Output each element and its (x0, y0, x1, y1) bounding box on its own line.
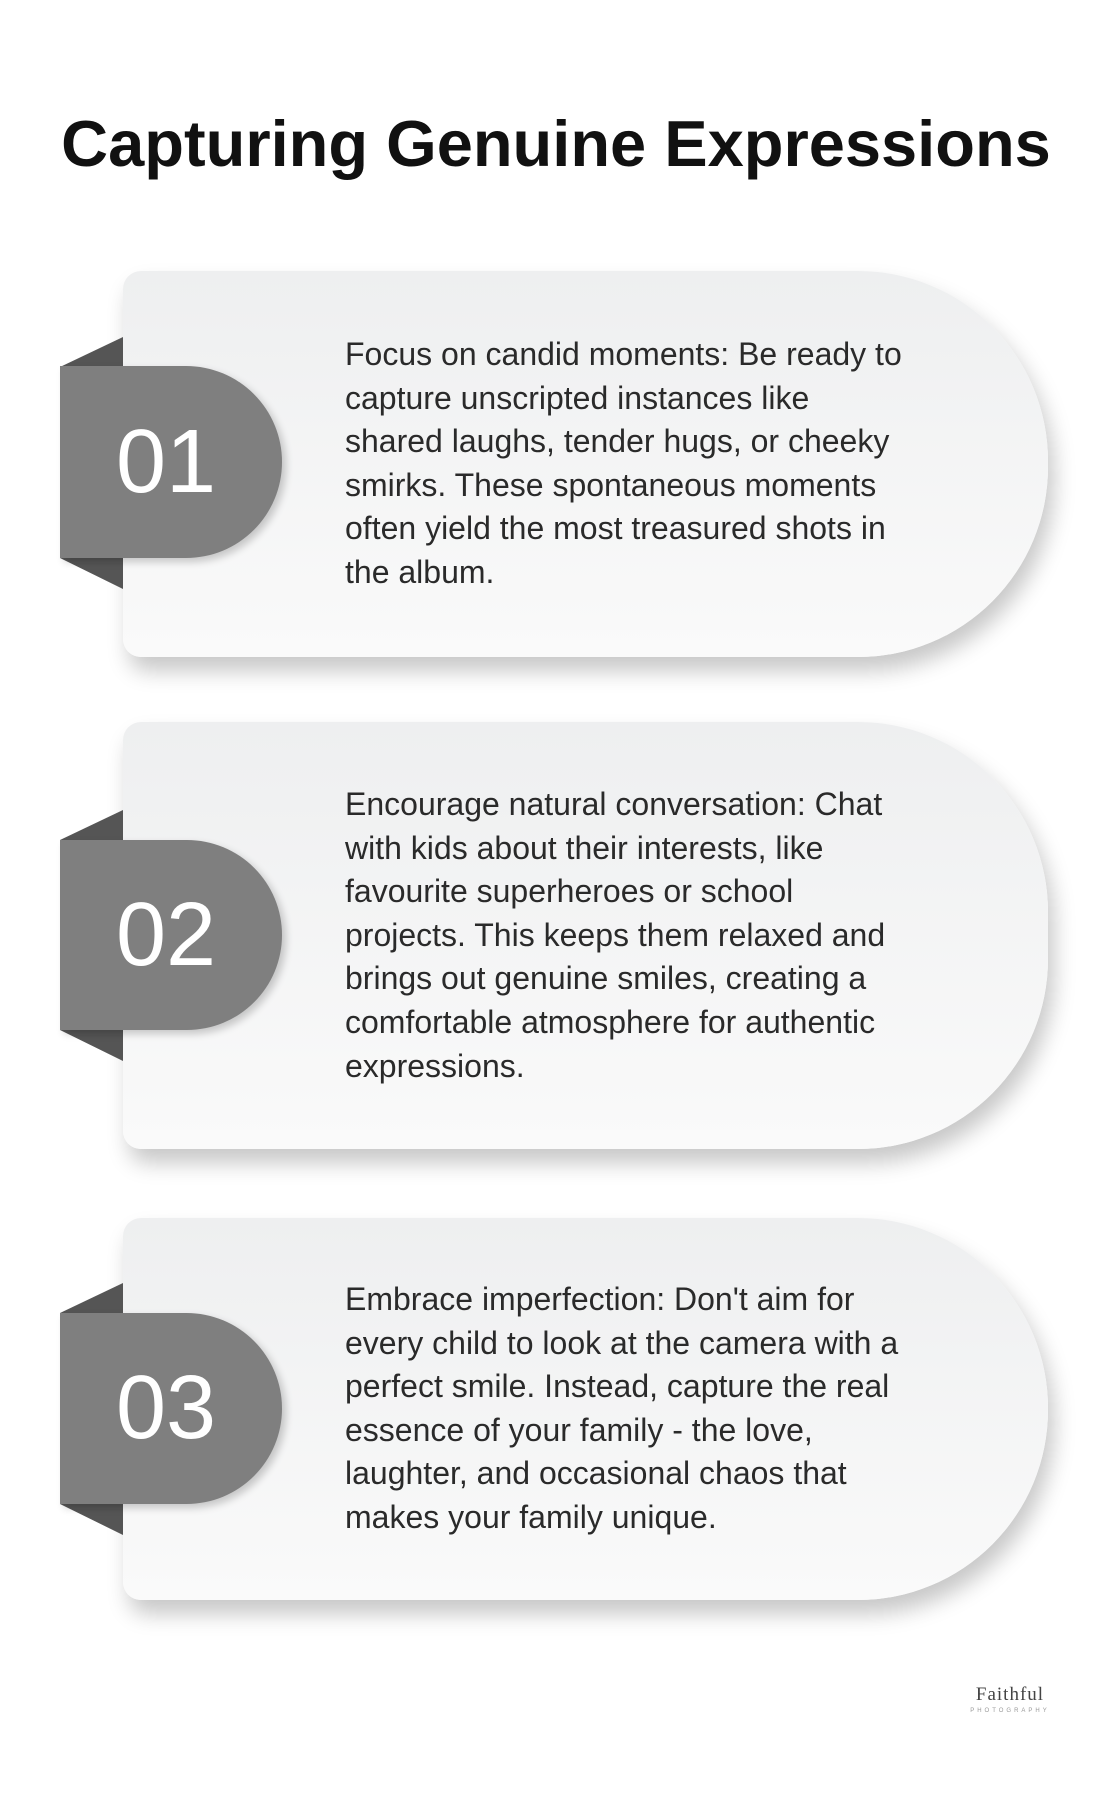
ribbon fold top 3 (60, 1283, 123, 1313)
text step 2: with kids about their interests, like (345, 830, 823, 866)
text step 2: expressions. (345, 1048, 525, 1084)
text step 3: makes your family unique. (345, 1499, 717, 1535)
badge 03 (60, 1313, 282, 1504)
ribbon fold bottom 2 (60, 1030, 123, 1061)
text step 2: Encourage natural conversation: Chat (345, 786, 882, 822)
text step 2: favourite superheroes or school (345, 873, 793, 909)
text step 3: perfect smile. Instead, capture the real (345, 1368, 889, 1404)
text step 1: smirks. These spontaneous moments (345, 467, 876, 503)
text step 3 (345, 1281, 898, 1535)
text step 3: essence of your family - the love, (345, 1412, 813, 1448)
badge 02: 02 (116, 884, 216, 984)
text step 1: capture unscripted instances like (345, 380, 809, 416)
badge 02 (60, 840, 282, 1030)
title: Capturing Genuine Expressions (61, 107, 1051, 180)
text step 1 (345, 336, 902, 590)
logo: PHOTOGRAPHY (970, 1708, 1050, 1714)
text step 2 (345, 786, 885, 1084)
panel: step 1 (123, 271, 1048, 657)
badge 01 (60, 366, 282, 558)
text step 2: brings out genuine smiles, creating a (345, 960, 866, 996)
badge 01: 01 (116, 412, 216, 512)
badge 03: 03 (116, 1358, 216, 1458)
text step 1: the album. (345, 554, 494, 590)
ribbon fold top 2 (60, 810, 123, 840)
text step 2: comfortable atmosphere for authentic (345, 1004, 875, 1040)
text step 2: projects. This keeps them relaxed and (345, 917, 885, 953)
text step 1: Focus on candid moments: Be ready to (345, 336, 902, 372)
ribbon fold top 1 (60, 337, 123, 367)
panel: step 3 (123, 1218, 1048, 1600)
ribbon fold bottom 1 (60, 558, 123, 589)
text step 1: often yield the most treasured shots in (345, 510, 886, 546)
ribbon fold bottom 3 (60, 1504, 123, 1535)
text step 3: Embrace imperfection: Don't aim for (345, 1281, 854, 1317)
text step 3: every child to look at the camera with a (345, 1325, 898, 1361)
logo (970, 1684, 1050, 1714)
panel: step 2 (123, 722, 1048, 1149)
logo: Faithful (976, 1684, 1044, 1705)
text step 1: shared laughs, tender hugs, or cheeky (345, 423, 889, 459)
text step 3: laughter, and occasional chaos that (345, 1455, 847, 1491)
